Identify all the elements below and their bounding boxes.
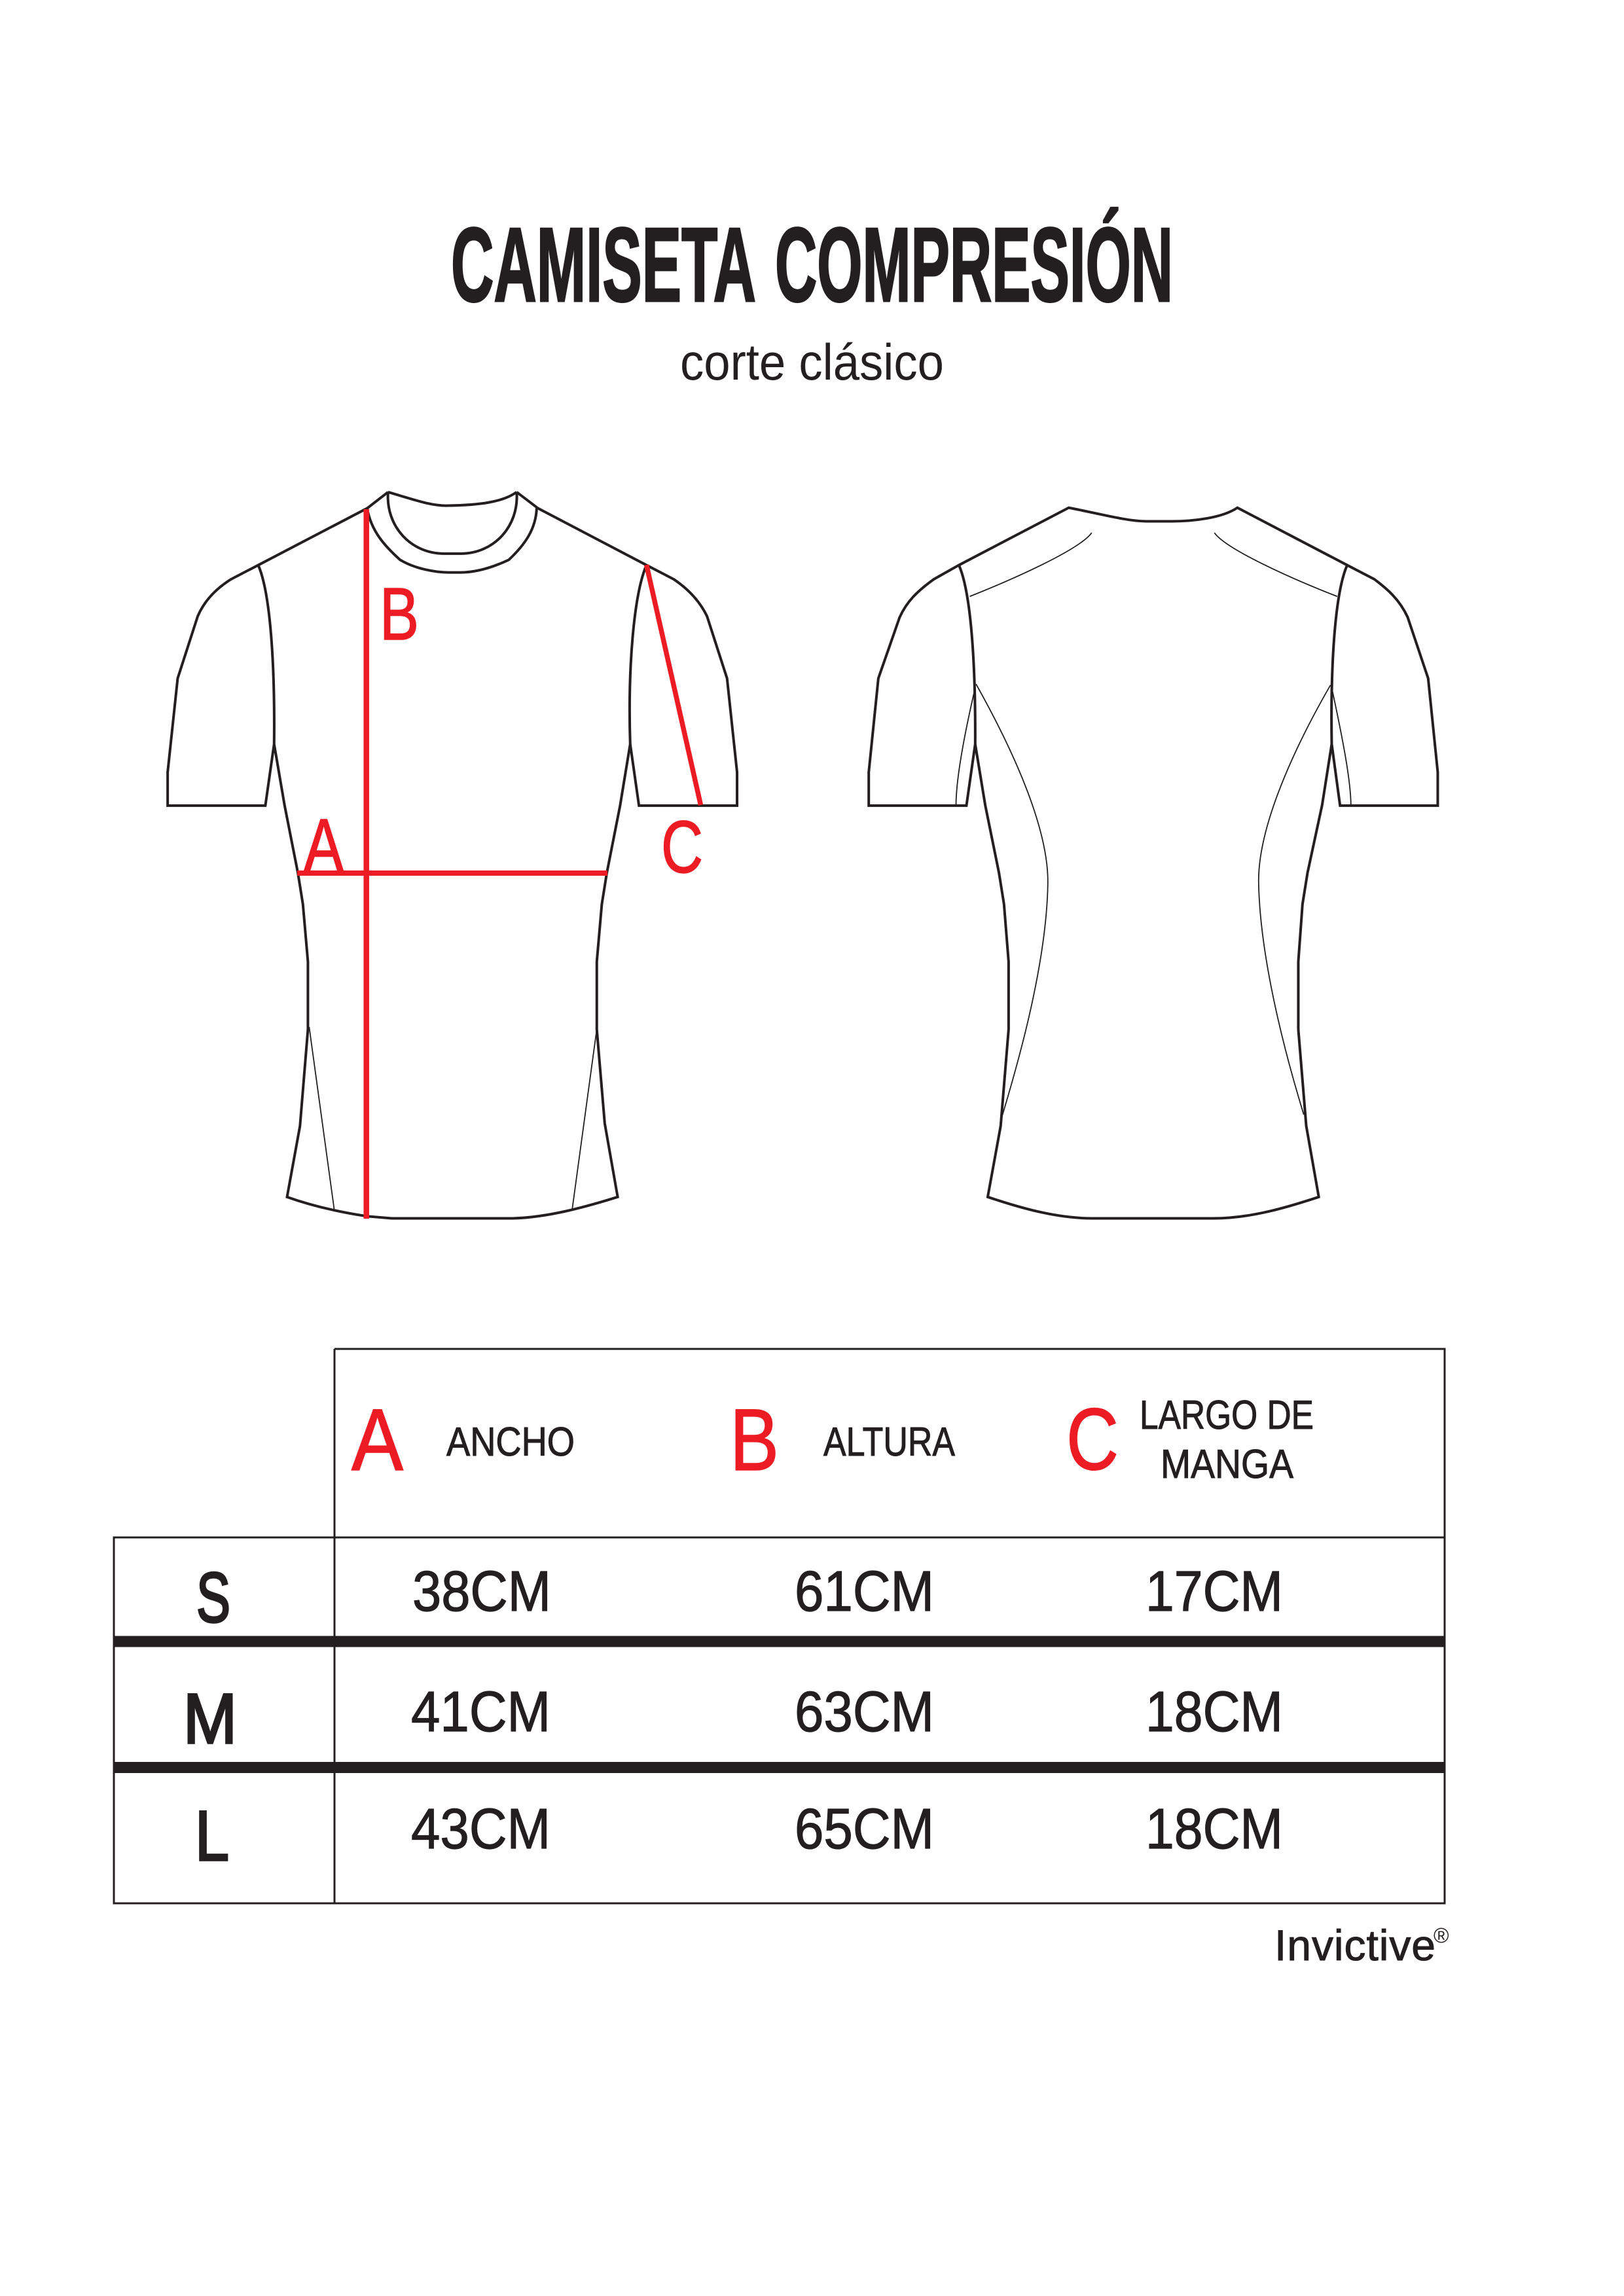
header A ancho: [352, 1391, 575, 1489]
header C largo de manga: LARGO DE: [1140, 1393, 1314, 1438]
header A ancho: A: [352, 1391, 404, 1489]
row M: M: [183, 1679, 237, 1758]
title: CAMISETA: [451, 206, 756, 324]
header B altura: B: [730, 1391, 779, 1489]
row M: 18CM: [1146, 1680, 1283, 1744]
letter B on shirt: B: [380, 573, 419, 655]
brand logo: Invictive: Invictive: [1274, 1921, 1435, 1969]
header C largo de manga: C: [1066, 1391, 1119, 1488]
row S: 38CM: [412, 1560, 551, 1623]
front shirt diagram: [168, 492, 737, 1219]
header B altura: [730, 1391, 956, 1489]
measure line A: width: [297, 870, 607, 876]
row L: L: [195, 1796, 229, 1875]
row S: 61CM: [795, 1560, 934, 1623]
row S: S: [196, 1558, 230, 1637]
row M: [183, 1679, 1283, 1758]
back shirt diagram: [869, 508, 1437, 1219]
header B altura: ALTURA: [823, 1420, 956, 1465]
title: COMPRESIÓN: [775, 206, 1173, 324]
row L: [195, 1796, 1283, 1875]
row S: 17CM: [1146, 1560, 1283, 1623]
header A ancho: ANCHO: [446, 1420, 575, 1465]
header C largo de manga: MANGA: [1161, 1442, 1294, 1487]
table grid: [114, 1349, 1445, 1903]
row S: [196, 1558, 1283, 1637]
subtitle: corte clásico: [680, 333, 944, 391]
letter C on shirt: C: [661, 806, 703, 888]
row M: 41CM: [411, 1680, 550, 1744]
header C largo de manga: [1066, 1391, 1314, 1488]
measure line C: sleeve length: [647, 565, 700, 805]
row L: 18CM: [1146, 1797, 1283, 1861]
row M: 63CM: [795, 1680, 934, 1744]
size table: [114, 1349, 1445, 1903]
measure line B: height: [363, 509, 369, 1219]
row L: 65CM: [795, 1797, 934, 1861]
letter A on shirt: A: [304, 803, 344, 888]
row L: 43CM: [411, 1797, 550, 1861]
brand logo: Invictive: ®: [1434, 1924, 1449, 1947]
